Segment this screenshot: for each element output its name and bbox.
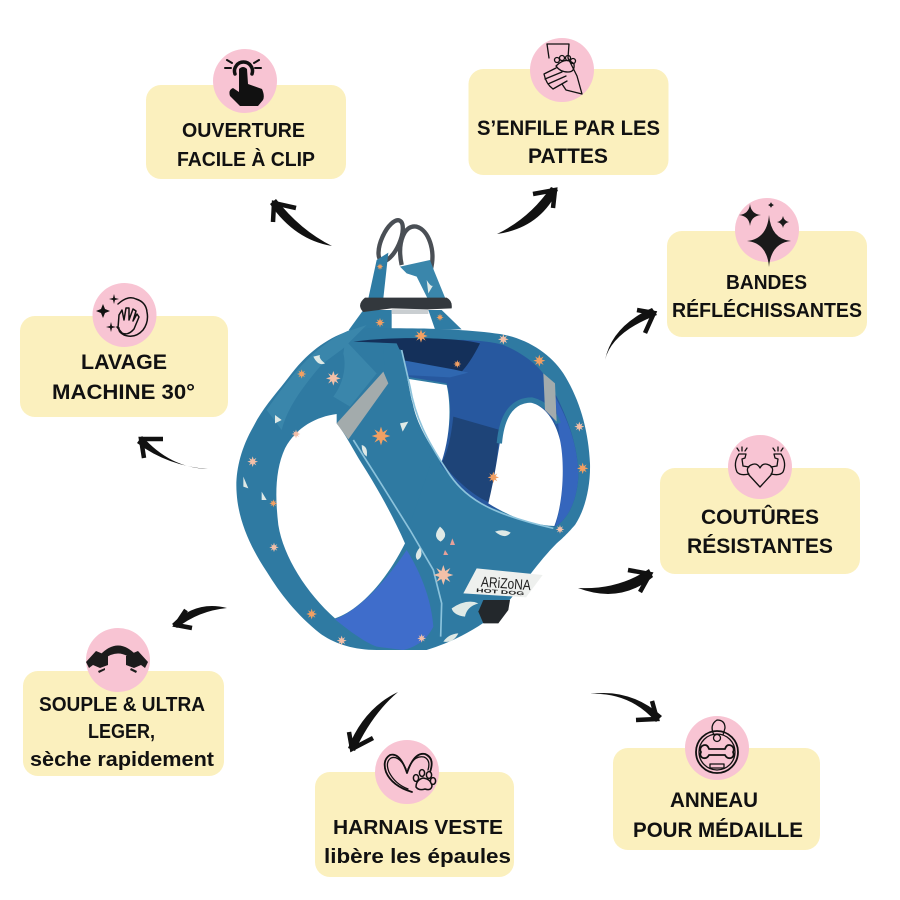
arrow: to clip opening [270, 199, 332, 246]
panel: ouverture [146, 49, 346, 179]
icon: heart and paw [385, 754, 436, 792]
panel: souple [23, 628, 224, 776]
text: HARNAIS VESTE [333, 817, 503, 839]
icon: sparkles [739, 202, 791, 267]
box [667, 231, 867, 337]
icon: bone tag [696, 720, 738, 773]
text: ANNEAU [670, 789, 758, 812]
box [23, 671, 224, 776]
text: LEGER, [88, 721, 155, 743]
icon badge [375, 740, 439, 804]
arrow: to tag ring [590, 693, 662, 722]
icon: paw in hand [544, 44, 582, 94]
icon badge [86, 628, 150, 692]
text [687, 504, 833, 558]
small d-ring [478, 600, 510, 623]
text: RÉSISTANTES [687, 533, 833, 558]
icon: bending material [86, 646, 148, 673]
text [324, 817, 511, 868]
reflective strips [337, 372, 557, 439]
webbing straps [267, 331, 348, 430]
panel: anneau [613, 716, 820, 850]
top straps [348, 253, 462, 331]
icon badge [530, 38, 594, 102]
text: RÉFLÉCHISSANTES [672, 299, 862, 322]
icon: hand cleaning [96, 294, 148, 336]
panel: harnais veste [315, 740, 514, 877]
text: PATTES [528, 145, 608, 168]
text: LAVAGE [81, 350, 167, 374]
text: sèche rapidement [30, 749, 214, 771]
right leg hole [488, 402, 563, 526]
icon badge [92, 283, 156, 347]
brand label: HOT DOG [476, 588, 524, 597]
harness body [236, 328, 590, 650]
text: OUVERTURE [182, 119, 305, 142]
text: libère les épaules [324, 846, 511, 868]
left leg hole [276, 414, 405, 618]
plastic buckle [360, 298, 452, 312]
text: BANDES [726, 272, 807, 294]
panel: bandes [667, 198, 867, 337]
icon: pointing hand [225, 60, 264, 106]
text: MACHINE 30° [52, 380, 195, 404]
harness photo [236, 217, 590, 650]
arrow: to wash [137, 436, 208, 469]
text: COUTÛRES [701, 504, 819, 529]
text [633, 789, 803, 842]
icon badge [685, 716, 749, 780]
text: S’ENFILE PAR LES [477, 117, 660, 140]
arrow: to seams [578, 569, 653, 594]
upper middle hole [405, 378, 449, 462]
box [146, 85, 346, 179]
brand label: ARiZoNA [480, 575, 532, 594]
text [52, 350, 195, 404]
text [477, 117, 660, 168]
icon badge [728, 435, 792, 499]
stitching seams [353, 350, 553, 637]
icon badge [735, 198, 799, 262]
text: SOUPLE & ULTRA [39, 694, 205, 716]
box [315, 772, 514, 877]
text [177, 119, 315, 171]
text: FACILE À CLIP [177, 148, 315, 171]
brand label [463, 568, 543, 597]
box [660, 468, 860, 574]
box [20, 316, 228, 417]
text: POUR MÉDAILLE [633, 819, 803, 842]
print pattern [269, 263, 588, 619]
inner lining back [400, 340, 578, 527]
metal rings [373, 217, 432, 270]
lower mesh lining [335, 550, 433, 650]
panel: s'enfile [468, 38, 668, 175]
text [30, 694, 214, 771]
panel: coutures [660, 435, 860, 574]
arrow: to supple [172, 606, 227, 628]
panel: lavage [20, 283, 228, 417]
icon badge [213, 49, 277, 113]
arrow: to vest [348, 692, 398, 751]
box [613, 748, 820, 850]
box [468, 69, 668, 175]
text [672, 272, 862, 322]
icon: muscle heart [735, 447, 785, 487]
arrow: to reflective strips [605, 308, 657, 360]
arrow: to legs [497, 187, 558, 234]
